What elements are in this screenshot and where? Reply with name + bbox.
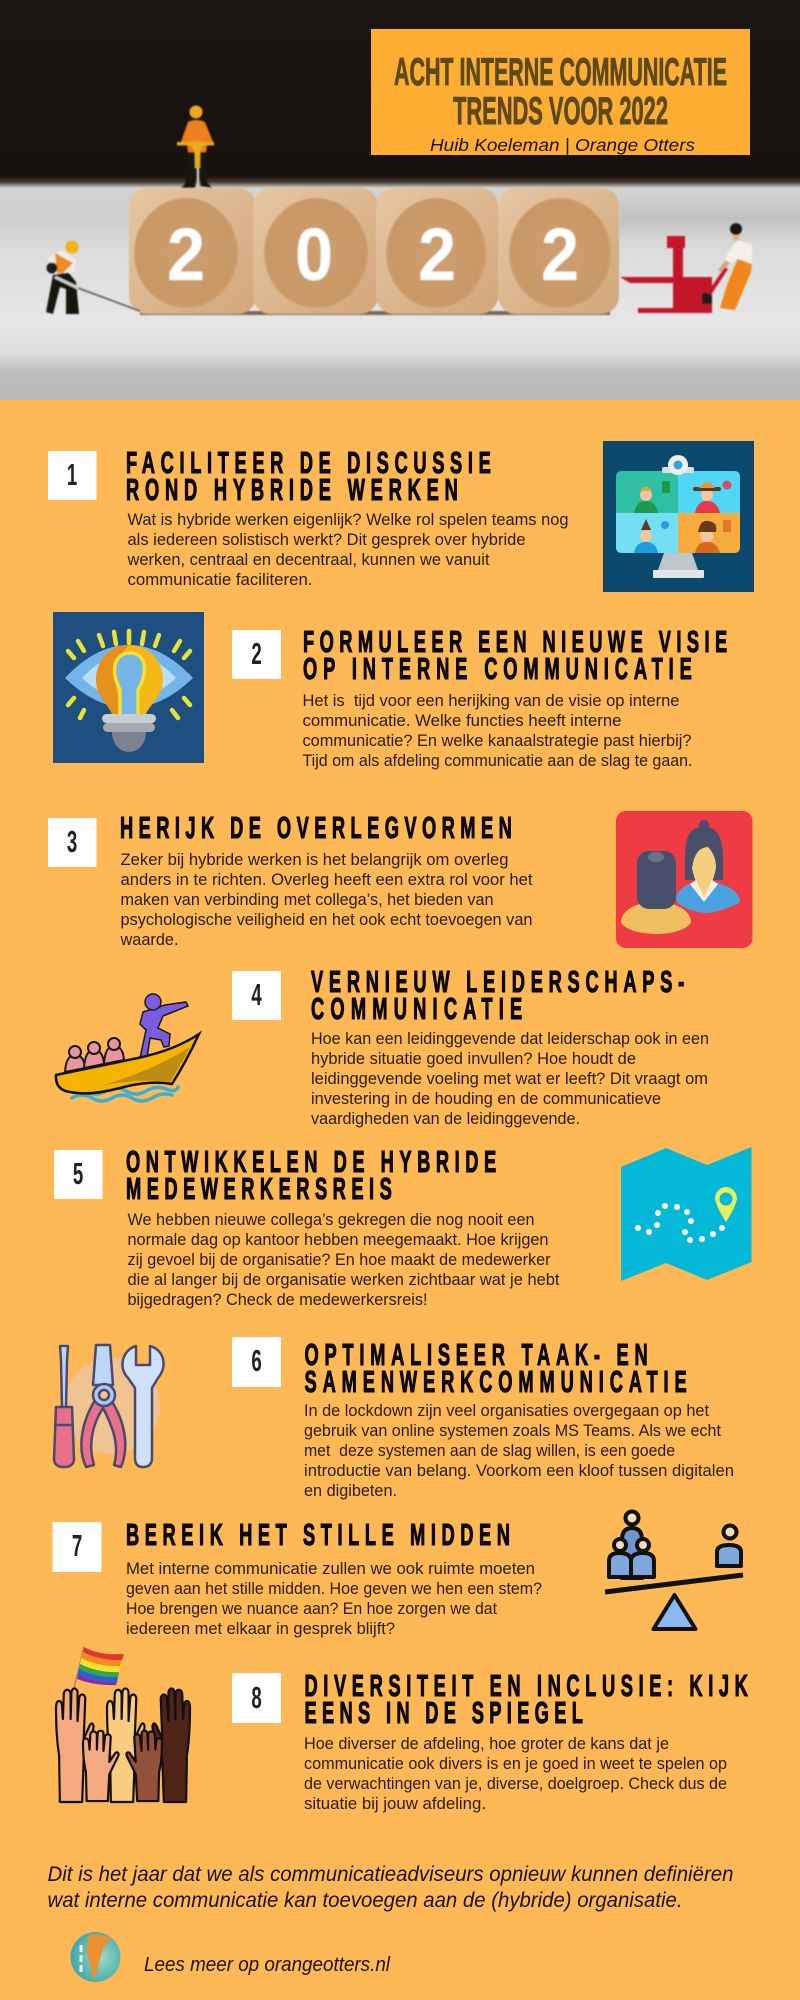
year digits	[167, 214, 579, 297]
heading 6: SAMENWERKCOMMUNICATIE	[304, 1365, 687, 1399]
body text 1: als iedereen solistisch werkt? Dit gesprek over hybride	[128, 531, 526, 549]
body text 2: Het is tijd voor een herijking van de visie op interne	[302, 692, 680, 710]
section 8: diversiteit en inclusie	[56, 1647, 748, 1813]
body text 6: en digibeten.	[304, 1482, 397, 1500]
section 2: nieuwe visie	[53, 612, 727, 770]
body text 5: bijgedragen? Check de medewerkersreis!	[128, 1291, 428, 1309]
body text 3: waarde.	[120, 931, 178, 949]
body text 5: die al langer bij de organisatie werken zichtbaar wat je hebt	[128, 1271, 560, 1289]
heading 5: ONTWIKKELEN DE HYBRIDE	[126, 1145, 496, 1179]
number box 6	[232, 1337, 281, 1387]
section 3: overlegvormen	[48, 811, 752, 949]
heading 2	[303, 625, 727, 686]
body text 7: Hoe brengen we nuance aan? En hoe zorgen we dat	[126, 1600, 497, 1618]
heading 1: FACILITEER DE DISCUSSIE	[126, 446, 491, 480]
body text 7: iedereen met elkaar in gesprek blijft?	[126, 1620, 395, 1638]
heading 5	[126, 1145, 496, 1206]
heading 2: OP INTERNE COMMUNICATIE	[303, 652, 692, 686]
icon: Orange Otters logo	[70, 1932, 120, 1982]
body text 8: situatie bij jouw afdeling.	[304, 1795, 486, 1813]
heading 8: EENS IN DE SPIEGEL	[304, 1696, 583, 1730]
figure: worker on top with jackhammer	[177, 106, 214, 188]
body text 1	[127, 511, 569, 589]
heading 5: MEDEWERKERSREIS	[126, 1172, 392, 1206]
body text 8: de verwachtingen van je, diverse, doelgroep. Check dus de	[304, 1775, 727, 1793]
section 5: medewerkersreis	[54, 1145, 752, 1309]
closing statement: wat interne communicatie kan toevoegen aan de (hybride) organisatie.	[48, 1888, 682, 1912]
number box 7: 7	[72, 1529, 82, 1563]
heading 6	[304, 1338, 687, 1399]
number box 6: 6	[251, 1344, 262, 1378]
year digits: 2	[418, 214, 456, 297]
wooden block 4	[498, 188, 619, 314]
body text 3: maken van verbinding met collega’s, het bieden van	[120, 891, 494, 909]
number box 3	[48, 818, 96, 867]
icon: eye with light bulb	[53, 612, 204, 763]
body text 2: communicatie. Welke functies heeft interne	[302, 712, 622, 730]
heading 7: BEREIK HET STILLE MIDDEN	[126, 1518, 510, 1552]
number box 1: 1	[67, 458, 77, 492]
number box 2	[232, 630, 281, 679]
heading 4	[311, 965, 684, 1026]
body text 8: communicatie ook divers is en je goed in weet te spelen op	[304, 1755, 727, 1773]
icon: map with route	[621, 1147, 752, 1281]
year digits: 2	[541, 214, 579, 297]
heading 6: OPTIMALISEER TAAK- EN	[304, 1338, 648, 1372]
figure: worker left with saw	[46, 240, 140, 314]
number box 4: 4	[251, 978, 262, 1012]
number box 5: 5	[73, 1157, 83, 1191]
icon: raised hands with rainbow flag	[56, 1647, 190, 1802]
body text 4: vaardigheden van de leidinggevende.	[311, 1110, 580, 1128]
title	[394, 51, 727, 133]
body text 5	[128, 1211, 560, 1309]
closing statement: Dit is het jaar dat we als communicatieadviseurs opnieuw kunnen definiëren	[48, 1862, 734, 1886]
number box 5	[54, 1150, 102, 1199]
body text 6	[304, 1402, 734, 1500]
title panel	[371, 29, 750, 155]
body text 6: In de lockdown zijn veel organisaties overgegaan op het	[304, 1402, 709, 1420]
year digits: 0	[295, 214, 333, 297]
body text 3: Zeker bij hybride werken is het belangrijk om overleg	[120, 851, 509, 869]
wooden block 3	[376, 188, 498, 314]
icon: tools	[54, 1345, 164, 1467]
figure: man pulling truck	[718, 223, 752, 310]
figure: red pallet truck	[620, 236, 728, 313]
body text 4: hybride situatie goed invullen? Hoe houdt de	[311, 1050, 636, 1068]
icon: leader on boat	[56, 994, 199, 1101]
heading 8: DIVERSITEIT EN INCLUSIE: KIJK	[304, 1669, 748, 1703]
section 1: hybride werken	[48, 441, 754, 592]
body text 1: communicatie faciliteren.	[128, 571, 312, 589]
body text 3: anders in te richten. Overleg heeft een extra rol voor het	[120, 871, 533, 889]
heading 1: ROND HYBRIDE WERKEN	[126, 473, 458, 507]
heading 2: FORMULEER EEN NIEUWE VISIE	[303, 625, 727, 659]
body text 5: zij gevoel bij de organisatie? En hoe maakt de medewerker	[128, 1251, 551, 1269]
body text 4: leidinggevende voeling met wat er leeft? Dit vraagt om	[311, 1070, 708, 1088]
body text 1: Wat is hybride werken eigenlijk? Welke rol spelen teams nog	[128, 511, 568, 529]
icon: video call on monitor	[603, 441, 754, 592]
body text 2: Tijd om als afdeling communicatie aan de slag te gaan.	[302, 752, 692, 770]
section 7: stille midden	[52, 1512, 743, 1638]
body text 5: We hebben nieuwe collega’s gekregen die nog nooit een	[128, 1211, 534, 1229]
icon: two people	[616, 811, 752, 948]
heading 3: HERIJK DE OVERLEGVORMEN	[120, 811, 512, 845]
section 4: leiderschapscommunicatie	[56, 965, 709, 1128]
body text 6: gebruik van online systemen zoals MS Teams. Als we echt	[304, 1422, 721, 1440]
body text 6: introductie van belang. Voorkom een kloof tussen digitalen	[304, 1462, 734, 1480]
closing statement	[48, 1862, 734, 1912]
body text 4: Hoe kan een leidinggevende dat leiderschap ook in een	[311, 1030, 709, 1048]
hero photo: wooden 2022 blocks with miniature workers	[0, 0, 800, 400]
number box 3: 3	[67, 825, 77, 859]
icon: balance scale with people	[605, 1512, 743, 1629]
body text 7	[126, 1560, 542, 1638]
body text 3: psychologische veiligheid en het ook echt toevoegen van	[120, 911, 532, 929]
body text 1: werken, centraal en decentraal, kunnen we vanuit	[127, 551, 490, 569]
number box 4	[232, 971, 281, 1020]
heading 1	[126, 446, 491, 507]
wooden block 2	[253, 188, 378, 314]
icon: rainbow flag	[74, 1647, 124, 1688]
number box 8: 8	[251, 1681, 262, 1715]
body text 8	[304, 1735, 727, 1813]
body text 7: geven aan het stille midden. Hoe geven we hen een stem?	[126, 1580, 542, 1598]
heading 8	[304, 1669, 748, 1730]
body text 3	[120, 851, 533, 949]
body text 8: Hoe diverser de afdeling, hoe groter de kans dat je	[304, 1735, 669, 1753]
body text 2	[302, 692, 692, 770]
body text 5: normale dag op kantoor hebben meegemaakt. Hoe krijgen	[128, 1231, 548, 1249]
number box 2: 2	[251, 637, 262, 671]
number box 7	[52, 1522, 102, 1572]
author line: Huib Koeleman | Orange Otters	[430, 135, 695, 155]
body text 7: Met interne communicatie zullen we ook ruimte moeten	[126, 1560, 535, 1578]
body text 2: communicatie? En welke kanaalstrategie past hierbij?	[302, 732, 692, 750]
wooden block 1	[129, 188, 256, 314]
body text 4: investering in de houding en de communicatieve	[311, 1090, 661, 1108]
heading 4: VERNIEUW LEIDERSCHAPS-	[311, 965, 684, 999]
number box 8	[232, 1673, 281, 1723]
read more link: Lees meer op orangeotters.nl	[144, 1954, 391, 1976]
year digits: 2	[167, 214, 205, 297]
number box 1	[48, 451, 96, 500]
heading 4: COMMUNICATIE	[311, 992, 522, 1026]
section 6: taak- en samenwerkcommunicatie	[54, 1337, 734, 1500]
body text 4	[311, 1030, 709, 1128]
body text 6: met deze systemen aan de slag willen, is een goede	[304, 1442, 675, 1460]
